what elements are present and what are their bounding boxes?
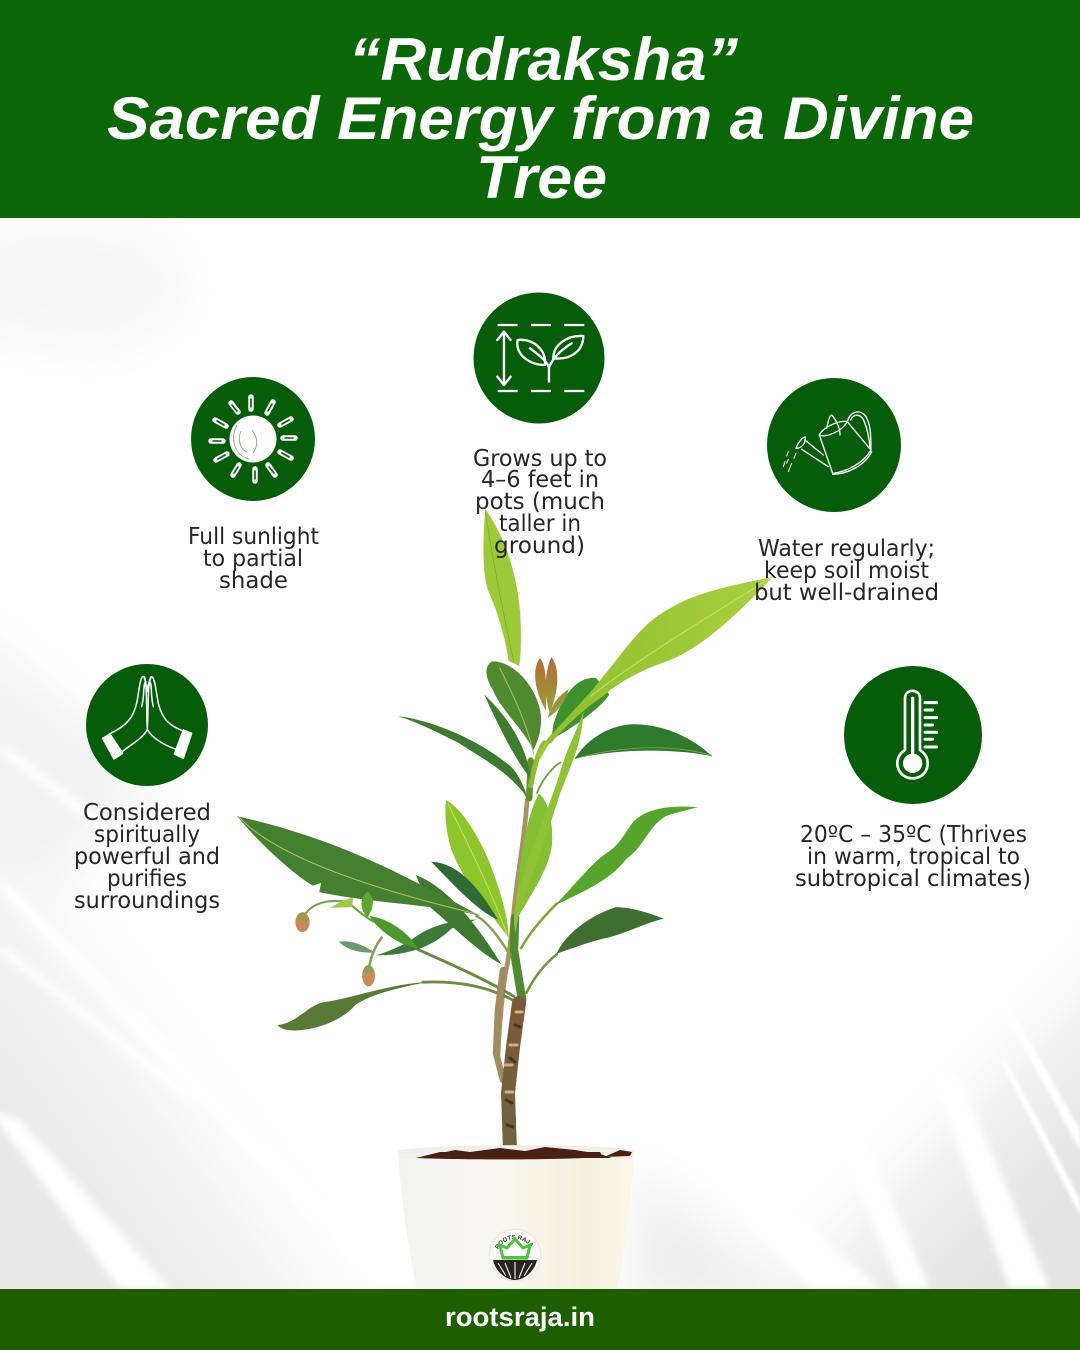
leaf: thin dark behind: [484, 695, 531, 779]
leaf: long bright centre: [514, 711, 584, 934]
text: height: Grows up to: [473, 446, 607, 472]
text: spiritual: surroundings: [74, 888, 220, 914]
leaf: dark upper centre: [486, 661, 541, 750]
text: spiritual: [74, 800, 220, 914]
leaf: back dark left: [416, 875, 501, 964]
leaf: bright left of stem: [445, 800, 509, 937]
flower buds: [295, 912, 375, 986]
title: Tree: [476, 144, 607, 211]
pot logo: [488, 1228, 542, 1282]
icon: sun: [191, 377, 315, 501]
text: height: pots (much: [475, 489, 605, 515]
leaf: reddish new growth: [535, 657, 569, 718]
text: spiritual: spiritually: [94, 822, 200, 848]
text: spiritual: purifies: [107, 866, 187, 892]
footer band: [0, 1289, 1080, 1350]
leaf: top shoot: [483, 509, 521, 666]
text: sunlight: to partial: [203, 546, 303, 572]
header band: [0, 0, 1080, 218]
leaf: small upright: [361, 892, 373, 917]
icon: praying hands: [86, 664, 208, 786]
text: temperature: [795, 822, 1031, 892]
leaf: lower right dark: [557, 907, 664, 954]
text: height: 4–6 feet in: [481, 467, 599, 493]
text: temperature: in warm, tropical to: [807, 844, 1020, 870]
pot logo: ROOTS RAJA: [494, 1234, 533, 1249]
text: water: [754, 536, 939, 606]
leaf: big left: [237, 816, 480, 916]
plant: [237, 509, 773, 1150]
leaf: small dark upper right: [551, 678, 609, 739]
leaf: mid dark: [431, 862, 498, 920]
pot: [398, 1145, 634, 1289]
leaf: right dark: [575, 724, 712, 759]
text: sunlight: [188, 524, 319, 594]
icon: watering can: [767, 378, 901, 512]
title: Sacred Energy from a Divine: [107, 85, 974, 152]
text: spiritual: powerful and: [74, 844, 220, 870]
leaf: small bright: [369, 916, 417, 948]
leaf: long lime right: [544, 577, 773, 743]
footer url: rootsraja.in: [445, 1302, 595, 1332]
text: height: ground): [494, 533, 585, 559]
text: water: Water regularly;: [758, 536, 935, 562]
text: temperature: subtropical climates): [795, 866, 1031, 892]
title: [107, 26, 974, 211]
leaf: lower left dark: [376, 920, 476, 955]
text: sunlight: Full sunlight: [188, 524, 319, 550]
leaf: bottom left: [277, 982, 426, 1030]
leaf: left thin dark: [398, 716, 526, 796]
icon: height and plant: [474, 292, 604, 424]
leaf: tiny bract: [330, 897, 353, 908]
trunk lower section: [496, 970, 522, 1150]
text: height: taller in: [499, 511, 581, 537]
leaf: wavy right: [555, 807, 698, 905]
soil: [416, 1147, 632, 1158]
leaf: small pale: [339, 941, 375, 953]
plant stems: [305, 700, 587, 1061]
text: height: [473, 446, 607, 559]
text: water: keep soil moist: [764, 558, 929, 584]
icon: thermometer: [844, 666, 982, 804]
text: sunlight: shade: [219, 568, 288, 594]
text: spiritual: Considered: [83, 800, 211, 826]
text: temperature: 20ºC – 35ºC (Thrives: [800, 822, 1027, 848]
text: water: but well-drained: [754, 580, 939, 606]
title: “Rudraksha”: [349, 26, 738, 93]
leaf: lower bright centre: [514, 794, 552, 925]
